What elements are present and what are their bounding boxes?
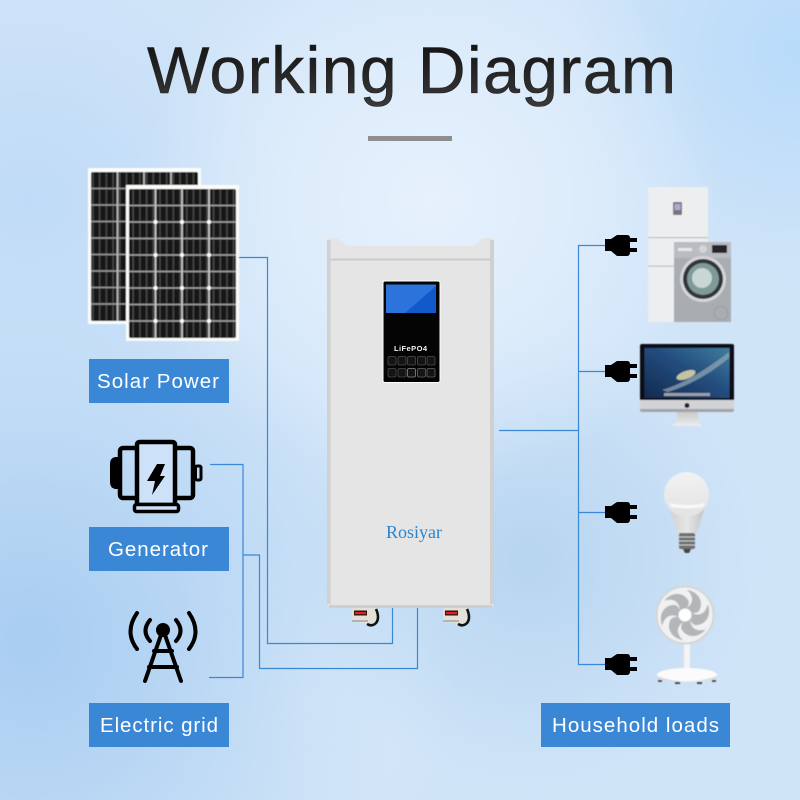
fridge (648, 187, 708, 322)
label: Electric grid (89, 703, 229, 747)
label: Household loads: Household loads (552, 714, 719, 737)
panel buttons (388, 356, 435, 377)
LCD screen (386, 284, 436, 313)
label: Generator (89, 527, 229, 571)
label: Household loads (541, 703, 730, 747)
control panel (383, 281, 440, 382)
icon: plug 4 (605, 654, 637, 675)
battery cabinet (327, 238, 494, 608)
brand name: Rosiyar (386, 522, 442, 542)
connection lines (209, 246, 605, 678)
monitor (640, 344, 734, 426)
back solar panel (88, 168, 201, 324)
light bulb (664, 472, 709, 553)
battery terminals (352, 608, 469, 625)
icon: plug 1 (605, 235, 637, 256)
icon: radio tower (130, 613, 196, 681)
fan (655, 586, 717, 684)
battery inverter unit (327, 238, 494, 625)
fridge and washing machine (648, 187, 731, 322)
icon: plug 3 (605, 502, 637, 523)
washing machine (674, 242, 731, 322)
control panel: LiFePO4 (394, 344, 428, 353)
icon: generator (110, 442, 201, 512)
front solar panel (126, 185, 239, 341)
title: Working Diagram (147, 33, 676, 107)
label: Electric grid: Electric grid (100, 714, 218, 737)
title divider (368, 136, 452, 141)
icon: plug 2 (605, 361, 637, 382)
label: Generator: Generator (108, 538, 208, 561)
label: Solar Power (89, 359, 229, 403)
label: Solar Power: Solar Power (97, 370, 219, 393)
icon: solar panels (88, 168, 239, 341)
